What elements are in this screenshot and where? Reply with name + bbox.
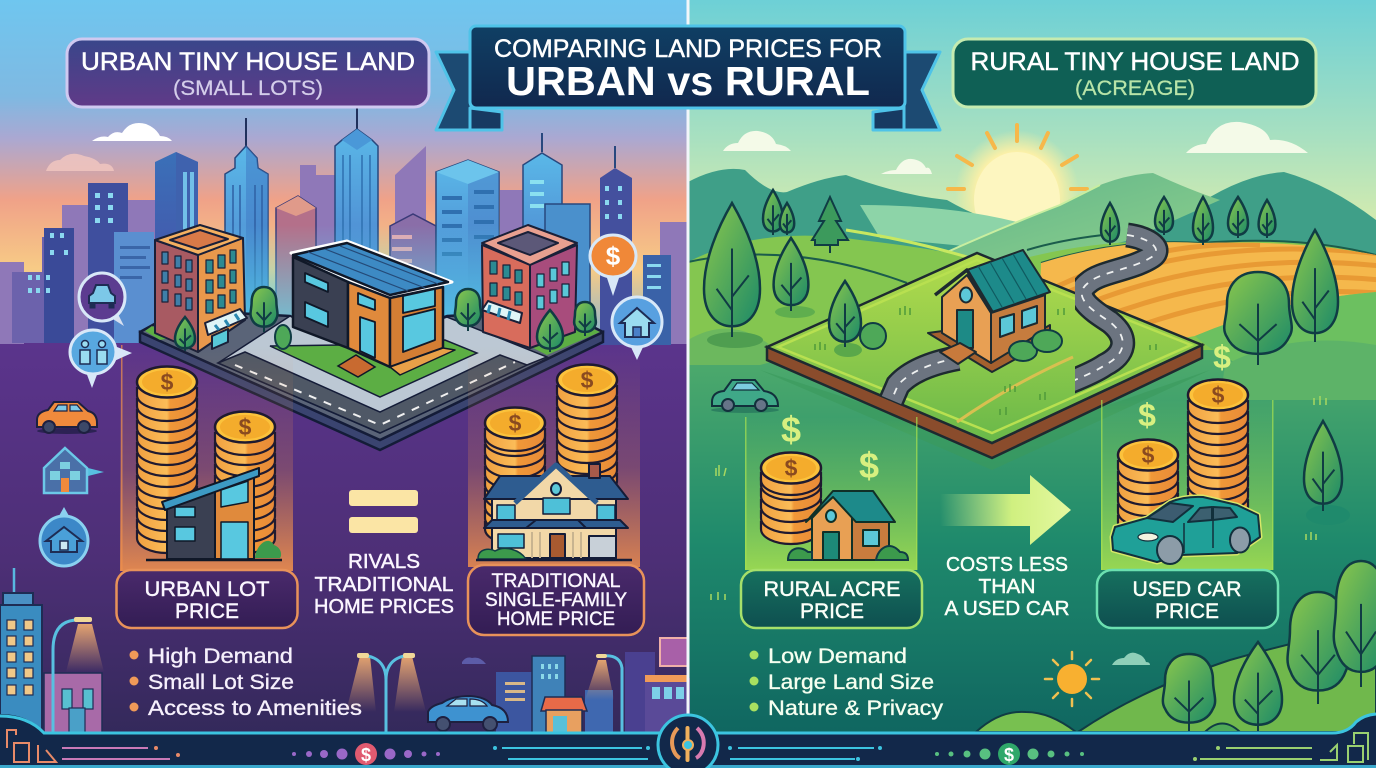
car: rural road car [711,380,779,413]
panel: used car stacks: $ [1138,397,1156,433]
label: traditional single-family home price: HOME PRICE [497,609,615,630]
group: rural background trees [704,190,1350,525]
panel: traditional home stacks: $ [509,410,522,436]
illustration: rural foreground hills and trees [976,396,1376,732]
road [885,235,1156,415]
icon: teal car [1112,497,1260,564]
panel: rural acre stacks [711,409,918,600]
panel: used car stacks: $ [1142,442,1155,468]
label: used car price: USED CAR [1132,578,1242,601]
icon: blue car [428,696,508,731]
label: traditional single-family home price: SINGLE-FAMILY [485,590,627,611]
label: rural acre price: RURAL ACRE [764,578,900,601]
label: urban lot price [116,570,298,628]
icon: clouds rural [723,122,1308,174]
label: rural acre price [741,570,922,628]
icon: street trees [175,287,596,352]
illustration: rural landscape [688,125,1376,400]
panel: used car stacks: $ [1213,339,1231,375]
icon: street lamp left [53,617,104,735]
panel: used car stacks: $ [1212,382,1225,408]
illustration: urban street scene [0,568,690,735]
icon: rural tiny house [928,250,1050,372]
illustration: rural land plot [760,235,1210,470]
text: rivals traditional home prices: HOME PRICES [314,596,454,618]
bubble: dollar: $ [606,241,621,271]
building: left tower [0,568,42,735]
list: rural bullets: Large Land Size [768,671,934,694]
coin: pink dollar: $ [361,745,371,765]
divider [686,0,690,716]
label: urban lot price: URBAN LOT [144,578,270,601]
panel: urban lot stacks [120,345,293,571]
header: urban tiny house land: (SMALL LOTS) [173,77,323,100]
icon: tiny modern house [291,241,455,375]
coin: pink dollar [355,743,377,765]
ribbon tails [436,52,940,130]
bubble: people [70,330,132,388]
label: used car price: PRICE [1155,600,1219,623]
bubble: small house icon [44,448,104,493]
coin: green dollar: $ [1004,745,1014,765]
panel: rural acre stacks: $ [781,409,801,450]
header: rural tiny house land [953,39,1316,107]
label: rural acre price: PRICE [800,600,864,623]
header: urban tiny house land [67,39,429,107]
icon: location bubbles urban [37,235,662,566]
text: costs less than a used car: COSTS LESS [946,554,1068,576]
header: rural tiny house land: RURAL TINY HOUSE LAND [970,48,1300,76]
illustration: city skyline [0,94,688,345]
label: traditional single-family home price [468,565,644,635]
label: used car price [1097,570,1278,628]
panel: traditional home stacks: $ [581,367,594,393]
panel: urban background [0,0,688,738]
text: costs less than a used car: A USED CAR [944,598,1070,620]
bubble: dollar [590,235,636,296]
title text: COMPARING LAND PRICES FOR [494,35,882,63]
panel: traditional home stacks [468,345,640,567]
list: urban bullets: Small Lot Size [148,671,294,694]
list: rural bullets: Nature & Privacy [768,697,944,720]
bubble: car [79,273,125,326]
icon: equals sign [349,490,418,533]
bar motifs left [7,730,56,762]
buildings: right cluster [496,638,690,735]
title text: URBAN vs RURAL [506,58,870,104]
icon: street lamp centre [346,653,426,732]
list: rural bullets: Low Demand [768,645,907,668]
list: urban bullets: Access to Amenities [148,697,362,720]
icon: small sun [1045,652,1099,706]
panel: rural acre stacks: $ [785,455,798,481]
label: urban lot price: PRICE [175,600,239,623]
medallion [658,715,718,768]
icon: arrow [940,475,1071,545]
panel: rural acre stacks: $ [859,445,879,486]
panel: urban lot stacks: $ [239,414,252,440]
text: rivals traditional home prices: TRADITIONAL [314,574,454,596]
icon: traditional house [484,464,628,558]
icon: right apartment building [482,225,577,348]
header: urban tiny house land: URBAN TINY HOUSE LAND [81,48,415,76]
coin: green dollar [998,743,1020,765]
icon: clouds urban [46,123,172,171]
illustration: urban isometric block [140,225,603,450]
header: rural tiny house land: (ACREAGE) [1075,77,1195,100]
icon: left apartment building [155,225,247,352]
bar motifs right [730,748,874,759]
title banner [436,26,940,130]
panel: rural background [688,0,1376,740]
bubble: house [612,297,662,360]
panel: bottom bar [0,714,1376,768]
panel: used car stacks [1101,339,1274,570]
title text [494,35,882,104]
text: costs less than a used car: THAN [978,576,1036,598]
list: urban bullets [130,645,362,720]
panel: urban lot stacks: $ [161,369,174,395]
icon: small rural house [806,491,895,560]
list: rural bullets [750,645,944,720]
list: urban bullets: High Demand [148,645,293,668]
bubble: house drop [40,507,88,566]
icon: orange car [37,402,97,434]
text: rivals traditional home prices [314,551,454,618]
text: rivals traditional home prices: RIVALS [348,551,420,573]
icon: small urban house [162,468,259,559]
icon: small cloud rural [1112,653,1150,665]
label: traditional single-family home price: TRADITIONAL [492,571,620,592]
text: costs less than a used car [944,554,1070,620]
